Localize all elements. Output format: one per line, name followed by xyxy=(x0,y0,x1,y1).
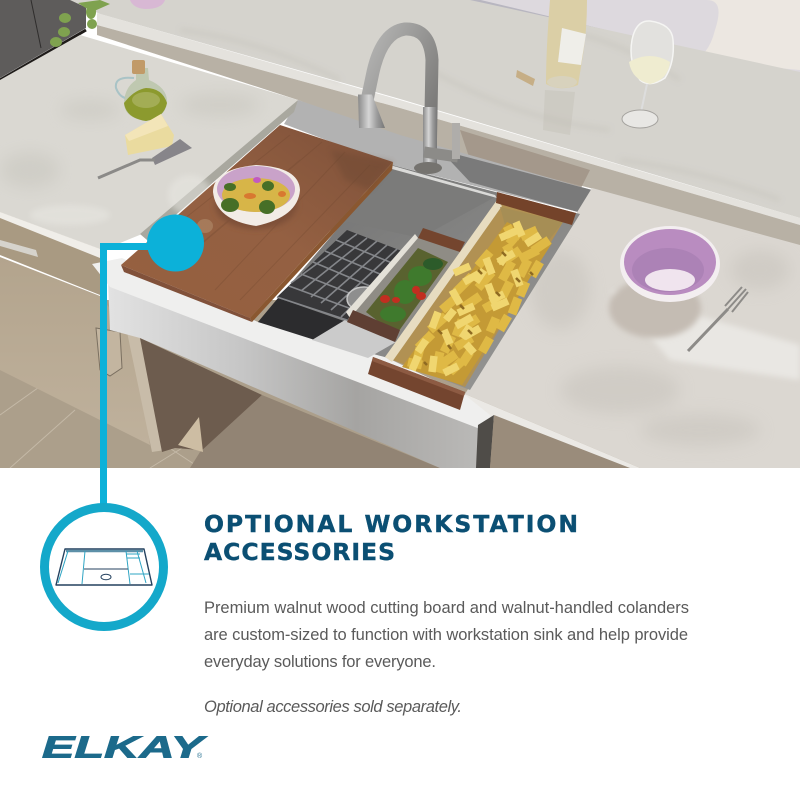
cabinet right of sink xyxy=(490,415,630,468)
cabinet side panel xyxy=(128,334,162,452)
sink deck xyxy=(284,100,592,212)
under-sink recess xyxy=(140,338,262,452)
purple dish xyxy=(130,0,165,9)
body text: Premium walnut wood cutting board and walnut-handled colanders xyxy=(204,599,689,617)
cork xyxy=(516,70,535,86)
wine bottle xyxy=(543,0,587,135)
upper drawer cabinet xyxy=(0,212,103,295)
kitchen photo xyxy=(0,0,800,468)
right countertop xyxy=(465,188,800,468)
upright support below back counter xyxy=(97,25,800,250)
penne pasta layer 2 xyxy=(412,222,540,373)
sink front top strip xyxy=(92,258,490,432)
large colander with penne xyxy=(368,192,576,410)
small colander near handle xyxy=(347,310,400,342)
small colander with vegetables xyxy=(346,228,465,342)
ring xyxy=(44,508,164,626)
body text: are custom-sized to function with workstation sink and help provide xyxy=(204,626,688,644)
callout dot xyxy=(147,214,204,272)
right counter veins xyxy=(530,250,790,446)
apron front of sink xyxy=(108,280,490,468)
drawer handle xyxy=(0,240,38,257)
callout connector xyxy=(104,214,204,510)
back counter veins xyxy=(331,80,338,82)
heading: OPTIONAL WORKSTATION xyxy=(204,510,578,538)
heading: ACCESSORIES xyxy=(204,538,395,566)
wine glass xyxy=(622,21,673,128)
sink basin xyxy=(258,165,580,390)
heading xyxy=(204,510,578,566)
sink outline icon xyxy=(56,549,152,585)
cabinet door handle xyxy=(96,328,122,376)
walnut cutting board xyxy=(121,125,393,322)
gooseneck faucet xyxy=(358,29,460,174)
body text: everyday solutions for everyone. xyxy=(204,653,436,671)
fork xyxy=(688,287,748,351)
large colander near handle xyxy=(368,357,465,410)
lower cabinets left xyxy=(0,257,150,445)
large colander far handle xyxy=(496,192,576,225)
plant xyxy=(50,0,110,47)
sink icon in ring xyxy=(44,508,164,626)
floor boards xyxy=(0,388,193,468)
dark tall cabinets top-left xyxy=(0,0,86,78)
back countertop front edge xyxy=(97,13,800,225)
left counter veins xyxy=(9,98,244,182)
back countertop xyxy=(70,0,800,218)
Elkay logo: ELKAY xyxy=(42,729,208,764)
back wall xyxy=(481,0,800,72)
oil bottle xyxy=(116,60,167,121)
wall baseboard xyxy=(470,0,595,28)
bowl shadow xyxy=(609,278,701,338)
grater xyxy=(98,139,192,178)
bowl with pasta on board xyxy=(213,165,300,229)
floor xyxy=(0,300,640,468)
penne pasta shadows xyxy=(424,252,533,365)
body text xyxy=(204,599,689,671)
cheese xyxy=(125,114,174,155)
leader line xyxy=(104,246,150,510)
footnote: Optional accessories sold separately. xyxy=(204,698,462,716)
Elkay logo: ® xyxy=(197,752,203,760)
sink grid rack xyxy=(277,230,407,320)
left countertop xyxy=(0,35,298,250)
drain xyxy=(346,286,368,307)
board wood grain xyxy=(187,136,350,300)
purple bowl xyxy=(620,226,720,302)
penne pasta layer 1 xyxy=(408,226,549,372)
small colander far handle xyxy=(418,228,465,252)
